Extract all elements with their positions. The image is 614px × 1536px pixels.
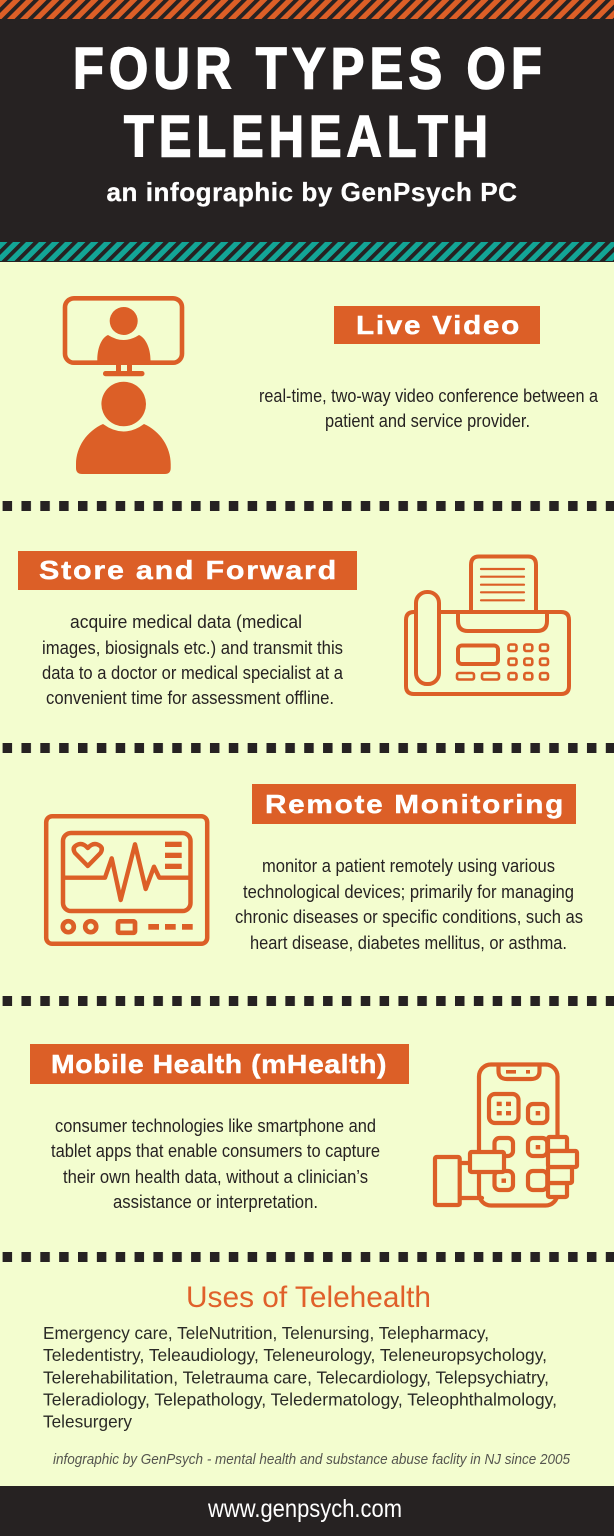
icon: phone in hand xyxy=(435,1064,577,1206)
text: Mobile Health description xyxy=(51,1116,380,1212)
text: Live Video description: patient and service provider. xyxy=(325,411,530,431)
text: Mobile Health description: tablet apps that enable consumers to capture xyxy=(51,1141,380,1161)
heading: Mobile Health xyxy=(30,1044,409,1084)
header band xyxy=(0,0,614,262)
text: Live Video description xyxy=(259,386,599,431)
text: Mobile Health description: assistance or interpretation. xyxy=(113,1192,318,1212)
text: Remote Monitoring description: monitor a patient remotely using various xyxy=(262,856,555,876)
subtitle: an infographic by GenPsych PC xyxy=(106,177,518,207)
icon: fax machine xyxy=(406,556,569,694)
text: uses list: Telerehabilitation, Teletrauma care, Telecardiology, Telepsychiatry, xyxy=(43,1368,549,1388)
icon: video call xyxy=(65,298,182,474)
heading: Live Video xyxy=(334,306,540,344)
text: Remote Monitoring description: technological devices; primarily for managing xyxy=(243,882,574,902)
text: Store and Forward description: images, biosignals etc.) and transmit this xyxy=(42,638,343,658)
text: uses list: Teledentistry, Teleaudiology, Teleneurology, Teleneuropsychology, xyxy=(43,1345,547,1365)
text: Remote Monitoring description: heart disease, diabetes mellitus, or asthma. xyxy=(250,933,567,953)
icon: heart monitor xyxy=(46,816,207,944)
text: Store and Forward description: convenient time for assessment offline. xyxy=(46,688,334,708)
footer: www.genpsych.com xyxy=(207,1495,402,1523)
credit line: infographic by GenPsych - mental health and substance abuse faclity in NJ since 2005 xyxy=(53,1452,571,1468)
text: Remote Monitoring description: chronic diseases or specific conditions, such as xyxy=(235,907,583,927)
text: Store and Forward description: data to a doctor or medical specialist at a xyxy=(42,663,344,683)
heading: Remote Monitoring xyxy=(252,784,576,824)
heading: Mobile Health: Mobile Health (mHealth) xyxy=(51,1049,387,1079)
text: uses list: Teleradiology, Telepathology, Teledermatology, Teleophthalmology, xyxy=(43,1390,557,1410)
footer xyxy=(0,1486,614,1536)
text: Store and Forward description xyxy=(42,612,344,708)
text: Store and Forward description: acquire medical data (medical xyxy=(70,612,302,632)
text: uses list: Emergency care, TeleNutrition, Telenursing, Telepharmacy, xyxy=(43,1323,489,1343)
heading: Remote Monitoring: Remote Monitoring xyxy=(265,789,565,819)
title xyxy=(73,36,547,170)
heading: Uses of Telehealth: Uses of Telehealth xyxy=(186,1281,431,1314)
heading: Store and Forward xyxy=(18,551,357,590)
heading: Live Video: Live Video xyxy=(356,310,521,340)
title: FOUR TYPES OF xyxy=(73,36,547,102)
text: Mobile Health description: consumer technologies like smartphone and xyxy=(55,1116,376,1136)
title: TELEHEALTH xyxy=(124,104,493,170)
heading: Store and Forward: Store and Forward xyxy=(39,555,338,585)
text: Remote Monitoring description xyxy=(235,856,583,953)
text: Mobile Health description: their own health data, without a clinician’s xyxy=(63,1167,368,1187)
text: uses list: Telesurgery xyxy=(43,1412,132,1432)
text: uses list xyxy=(43,1323,557,1432)
